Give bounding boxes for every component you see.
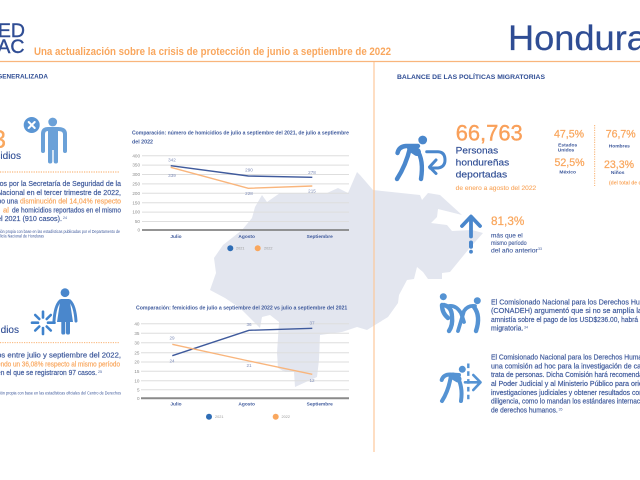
text block: comision ad hoc: de derechos humanos.: [491, 408, 558, 415]
stat: increase: mismo período: [491, 240, 527, 247]
stats: origin of deportations: Unidos: [558, 148, 575, 154]
legend: [206, 414, 290, 420]
icon: upward arrow: [462, 216, 480, 254]
stats: sex and age of deportees: Niños: [611, 170, 625, 176]
stats: origin of deportations: México: [559, 169, 576, 175]
legend: 2022: [282, 415, 290, 419]
stat: increase: del año anterior: [491, 247, 538, 254]
line 2022: [171, 167, 312, 188]
y axis labels: 250: [132, 182, 140, 186]
data labels: 37: [309, 320, 315, 326]
text block: CONADEH amnistia: 34: [524, 326, 528, 330]
x axis labels: Julio: [170, 402, 182, 408]
stat: increase: [491, 214, 542, 254]
y axis labels: 5: [137, 387, 140, 392]
text block: homicidios: [0, 181, 121, 223]
source note: femicidios: ción propia con base en las estadísticas oficiales del Centro de Derechos: [0, 390, 121, 396]
data labels: 12: [309, 378, 315, 383]
legend: 2021: [215, 415, 223, 419]
x axis labels: Septiembre: [307, 402, 333, 408]
y axis labels: 10: [134, 378, 140, 383]
text block: femicidios: [0, 353, 121, 377]
y axis labels: 400: [132, 153, 140, 158]
text block: homicidios: de homicidios reportados en el mismo: [12, 208, 121, 214]
text block: homicidios: disminución del 14,04% respecto: [20, 198, 121, 206]
line 2021: [171, 166, 312, 177]
y axis labels: [132, 153, 140, 233]
data labels: 339: [168, 173, 176, 178]
y axis labels: 0: [137, 228, 140, 233]
text block: femicidios: en el que se registraron 97 casos.: [0, 370, 97, 377]
text block: homicidios: 24: [63, 216, 67, 220]
y axis labels: 300: [132, 172, 140, 177]
data labels: 342: [168, 158, 176, 162]
y axis labels: 150: [132, 200, 140, 205]
x axis labels: Agosto: [238, 402, 255, 408]
x axis labels: Septiembre: [307, 234, 333, 240]
y axis labels: 30: [134, 340, 140, 345]
stats: origin of deportations: Estados: [558, 143, 577, 149]
y axis labels: 35: [134, 331, 140, 336]
stat: personas deportadas: de enero a agosto del 2022: [456, 185, 537, 192]
y axis labels: 20: [134, 360, 140, 365]
text block: femicidios: 25: [98, 370, 102, 374]
x axis labels: [170, 234, 333, 240]
y axis labels: 15: [134, 369, 140, 374]
stat: increase: 33: [538, 247, 542, 251]
y axis labels: 100: [132, 210, 140, 215]
chart title: del 2022: [132, 140, 153, 146]
background map of Honduras: [210, 172, 483, 387]
icon: two figures struggling: [440, 293, 481, 331]
stats: sex and age of deportees: Hombres: [609, 143, 630, 149]
y axis labels: [134, 321, 140, 401]
heading: balance de las politicas migratorias: BALANCE DE LAS POLÍTICAS MIGRATORIAS: [397, 72, 546, 81]
stat: personas deportadas: Personas: [456, 145, 498, 156]
legend: 2022: [264, 247, 272, 251]
x axis labels: [170, 402, 333, 408]
icon: deported runner with return arrow: [397, 136, 445, 179]
line 2022: [172, 344, 312, 374]
stat: personas deportadas: deportadas: [456, 170, 507, 181]
data labels: 215: [308, 188, 316, 194]
stat: personas deportadas: hondureñas: [456, 158, 509, 169]
stat: personas deportadas: [456, 121, 537, 192]
stat: homicidios: [0, 126, 21, 162]
y axis labels: 200: [132, 191, 140, 196]
text block: comision ad hoc: 35: [558, 408, 562, 412]
text block: CONADEH amnistia: [491, 299, 640, 333]
y axis labels: 350: [132, 163, 140, 168]
stats: sex and age of deportees: 23,3%: [604, 159, 634, 171]
source note: homicidios: ción propia con base en las estadísticas publicadas por el Departamento de: [0, 229, 121, 234]
source note: homicidios: [0, 229, 121, 238]
chart title: Comparación: número de homicidios de julio a septiembre del 2021, de julio a septiembre: [132, 131, 349, 137]
x axis labels: Agosto: [238, 234, 255, 240]
text block: comision ad hoc: [491, 354, 640, 415]
text block: homicidios: al: [3, 208, 9, 214]
stats: sex and age of deportees: [604, 128, 640, 186]
icon: figure crossing border: [442, 364, 480, 402]
stat: increase: 81,3%: [491, 214, 525, 228]
data labels: 24: [169, 358, 175, 364]
icon: woman with burst: [32, 288, 76, 334]
line 2021: [172, 328, 312, 356]
chart title: [132, 131, 349, 146]
legend: 2021: [236, 247, 244, 251]
logo: [0, 20, 25, 58]
stat: personas deportadas: 66,763: [456, 121, 523, 146]
stats: origin of deportations: [554, 128, 585, 175]
icon: man with x badge: [24, 117, 65, 164]
y axis labels: 50: [135, 219, 140, 224]
text block: CONADEH amnistia: (CONADEH) argumentó que si no se amplía la: [491, 308, 640, 315]
legend: [227, 245, 272, 251]
stat: increase: más que el: [491, 232, 523, 239]
x axis labels: Julio: [170, 234, 182, 240]
data labels: 21: [246, 363, 252, 368]
chart: homicidios: [132, 131, 349, 251]
data labels: 228: [245, 191, 253, 196]
subtitle: Una actualización sobre la crisis de protección de junio a septiembre de 2022: [34, 46, 391, 58]
data labels: 290: [245, 168, 253, 172]
stats: origin of deportations: 47,5%: [554, 128, 584, 140]
text block: CONADEH amnistia: migratoria.: [491, 326, 523, 333]
data labels: [168, 158, 316, 196]
y axis labels: 40: [134, 321, 140, 326]
chart: femicidios: [134, 305, 349, 420]
data labels: 29: [169, 336, 175, 340]
data labels: 36: [246, 322, 252, 327]
chart title: Comparación: femicidios de julio a septiembre del 2022 vs julio a septiembre del 2021: [136, 305, 347, 311]
y axis labels: 25: [134, 350, 140, 355]
data labels: [169, 320, 315, 383]
y axis labels: 0: [137, 396, 140, 401]
stats: sex and age of deportees: 76,7%: [606, 128, 636, 140]
data labels: 278: [308, 170, 316, 175]
stats: origin of deportations: 52,5%: [554, 157, 585, 169]
